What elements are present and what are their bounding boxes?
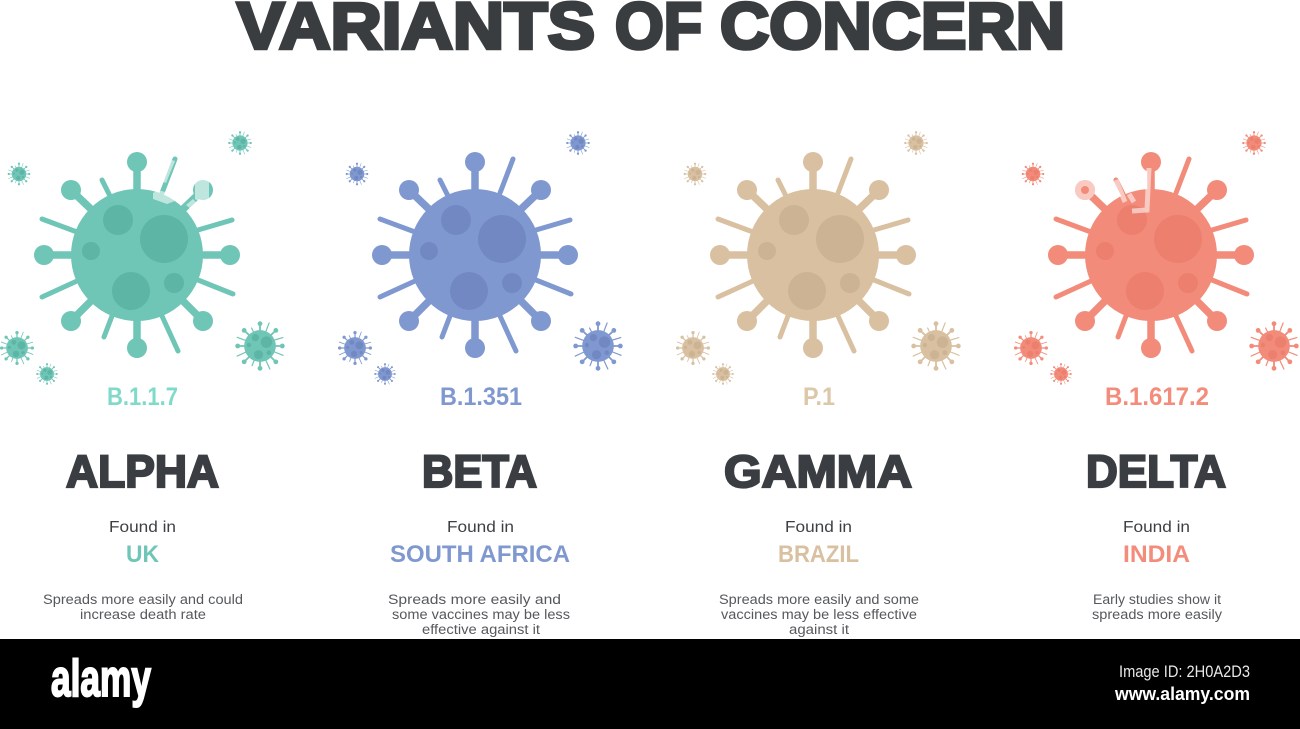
description: beta: effective against it	[422, 622, 540, 637]
description: gamma	[719, 592, 919, 637]
icon: gamma virus cluster	[676, 131, 961, 385]
description: beta	[388, 592, 570, 637]
description: alpha: increase death rate	[80, 607, 206, 622]
description: alpha: Spreads more easily and could	[43, 592, 243, 607]
country: UK: UK	[126, 541, 160, 568]
icon: beta virus cluster	[338, 131, 623, 385]
variant code: B.1.351: B.1.351	[440, 383, 522, 411]
description: beta: some vaccines may be less	[392, 607, 570, 622]
description: delta	[1092, 592, 1222, 622]
panel: alpha	[0, 131, 285, 622]
found in label: Found in	[109, 519, 176, 536]
icon: delta virus cluster	[1014, 131, 1299, 385]
found in label: Found in	[1123, 519, 1190, 536]
description: delta: spreads more easily	[1092, 607, 1222, 622]
panel: beta	[338, 131, 623, 637]
variant name: BETA: BETA	[422, 446, 537, 497]
variant name: DELTA: DELTA	[1086, 446, 1226, 497]
found in label: Found in	[447, 519, 514, 536]
variant name: ALPHA: ALPHA	[66, 446, 219, 497]
description: gamma: vaccines may be less effective	[721, 607, 917, 622]
footer bar	[0, 639, 1300, 729]
variant code: B.1.617.2: B.1.617.2	[1105, 383, 1209, 411]
country: India: INDIA	[1123, 541, 1190, 568]
description: gamma: Spreads more easily and some	[719, 592, 919, 607]
found in label: Found in	[785, 519, 852, 536]
website: www.alamy.com	[1114, 684, 1250, 704]
icon: alpha virus cluster	[0, 131, 285, 385]
variant name: GAMMA: GAMMA	[724, 446, 912, 497]
country: Brazil: BRAZIL	[778, 541, 859, 568]
image id: Image ID: 2H0A2D3	[1119, 663, 1250, 681]
panel: delta	[1014, 131, 1299, 622]
title	[237, 0, 1065, 62]
description: delta: Early studies show it	[1093, 592, 1221, 607]
description: beta: Spreads more easily and	[388, 592, 561, 607]
panel: gamma	[676, 131, 961, 637]
description: alpha	[43, 592, 243, 622]
country: South Africa: SOUTH AFRICA	[390, 541, 570, 568]
variant code: P.1: P.1	[803, 383, 835, 411]
description: gamma: against it	[789, 622, 849, 637]
alamy logo: alamy	[51, 650, 151, 708]
variant code: B.1.1.7: B.1.1.7	[107, 383, 178, 411]
